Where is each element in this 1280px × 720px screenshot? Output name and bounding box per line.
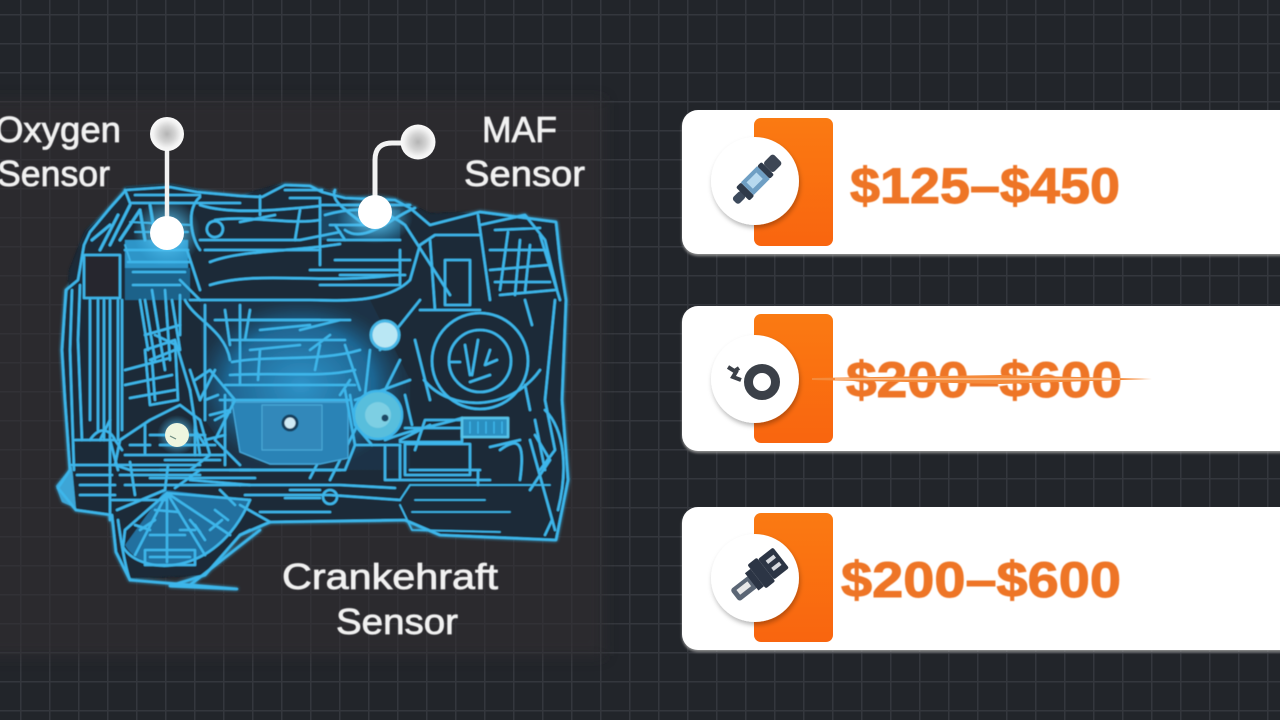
panel: engine diagram backdrop [0,100,604,656]
illustration: blueprint engine [56,183,568,589]
panel: MAF sensor cost card [682,507,1280,650]
panel: crankshaft sensor cost card [682,306,1280,451]
left stack [125,325,200,405]
small sensor: flat [371,321,399,349]
intake [185,235,480,420]
label: crankshaft sensor: Sensor [336,601,458,642]
outer outline [58,185,568,589]
sensor marker: crankshaft [157,415,197,455]
price: $200–$600 [841,552,1121,608]
label: crankshaft sensor: Crankehraft [282,556,498,597]
lower block [385,418,500,450]
engine body fill [58,183,568,578]
orange tab [754,314,833,443]
callout: MAF sensor marker [337,124,436,244]
label: MAF sensor [464,109,585,194]
orange tab [754,118,833,246]
callout: oxygen sensor marker [133,117,201,267]
label: oxygen sensor: Sensor [0,153,110,194]
head and valve cover [200,196,340,262]
icon: connector sensor [711,534,799,622]
orange tab [754,513,833,642]
flywheel fan [123,500,250,566]
label: MAF sensor: MAF [482,109,557,150]
label: oxygen sensor [0,109,121,194]
right cover [380,215,560,350]
label: crankshaft sensor [282,556,498,642]
label: MAF sensor: Sensor [464,153,585,194]
panel: oxygen sensor cost card [682,110,1280,254]
pulley [432,313,528,409]
highlighted cylinders [125,222,190,260]
central plate [232,402,348,464]
price with strike-through: $200–$600 [846,352,1122,408]
icon: oxygen sensor [711,137,799,225]
icon: ring sensor [711,335,799,423]
glowing core [200,300,410,470]
price: $125–$450 [850,158,1120,214]
